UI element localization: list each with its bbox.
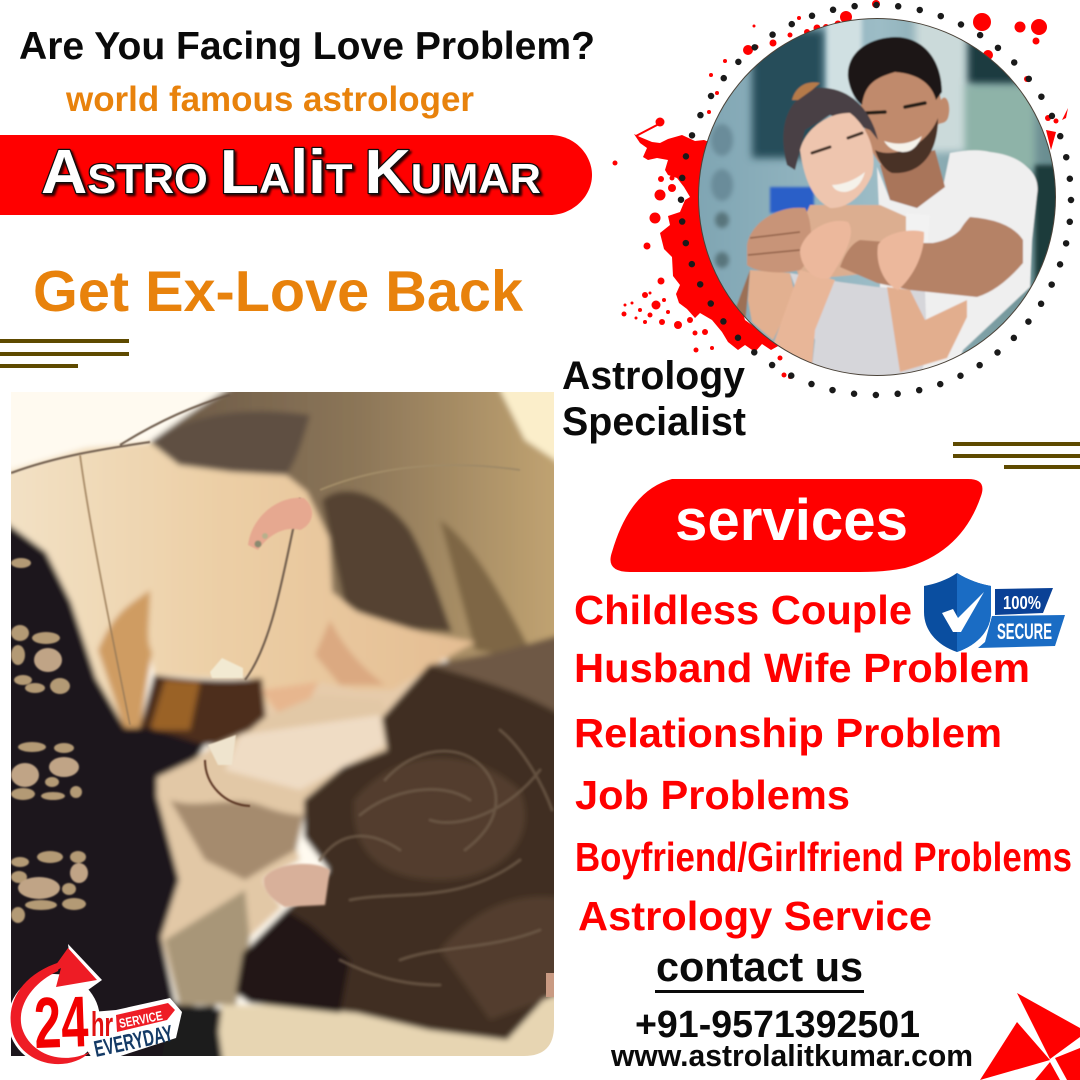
woman's hands [800,221,851,279]
text: astrology specialist: Astrology [562,354,745,398]
lace patches [11,558,88,923]
badge: 24hr service everyday: EVERYDAY [92,1020,175,1062]
necklace [80,455,130,725]
contact us: contact us [656,944,863,990]
service list [574,587,1072,939]
woman's tank top [790,273,927,385]
woman's shoulders and chest [790,205,907,280]
man's back behind arm [736,270,750,318]
text: astrology specialist: Specialist [562,400,746,444]
woman's mouth [210,658,243,678]
man's face and neck [151,700,362,991]
icon: red pinwheel [980,993,1080,1080]
services pill [610,479,982,572]
banner: astro lalit kumar: ASTRO LAliT KUMAR [41,138,541,207]
services pill: services [675,488,908,553]
hair curls [320,730,552,985]
woman's face and neck [0,442,475,730]
dotted ring [681,5,1071,395]
main blob [634,134,780,352]
photo: smiling couple in circle [698,18,1056,376]
service list: Childless Couple [574,587,912,633]
black sleeve [198,1000,226,1056]
man's arm [840,217,1023,297]
badge: 24hr service everyday [8,944,182,1066]
stray hair strands [11,395,520,680]
badge: 24hr service everyday: 24 [33,982,90,1064]
man's head [860,70,950,166]
woman's left arm [748,270,795,340]
ear with piercings [248,498,312,550]
hair under chin [135,675,268,745]
paint splatter [612,0,1068,379]
service list: Relationship Problem [574,710,1002,756]
heading: get ex-love back: Get Ex-Love Back [33,260,524,324]
man's neck [880,150,945,208]
icon: 100% secure badge: 100% [1003,593,1041,613]
photo: embracing couple [0,380,570,1080]
man's open mouth [208,735,236,765]
black lace top [0,518,228,1070]
title: are you facing love problem: Are You Facing Love Problem? [19,25,595,68]
decorative lines left [0,339,129,368]
tank strap [905,216,908,232]
decorative lines right [953,442,1080,469]
text: astrology specialist [562,354,746,444]
service list: Astrology Service [578,893,932,939]
woman's face [800,113,874,208]
woman's hair [155,392,554,666]
badge: 24hr service everyday: hr [91,1006,113,1044]
service list: Job Problems [575,772,850,818]
arm [212,994,554,1056]
icon: 100% secure badge [924,573,1065,652]
man's hair [284,662,554,1044]
subtitle: world famous astrologer: world famous astrologer [65,79,474,119]
woman's right arm [887,287,967,372]
man's hand [747,208,811,272]
man's ear [264,864,330,907]
skin at right edge [546,973,554,997]
website: www.astrolalitkumar.com [610,1038,973,1073]
badge: 24hr service everyday: SERVICE [118,1008,164,1031]
nose [264,683,316,712]
phone number: +91-9571392501 [635,1003,920,1045]
skin fill behind faces [260,672,426,720]
service list: Husband Wife Problem [574,645,1030,691]
man's t-shirt [877,150,1038,385]
woman's hair [783,88,878,170]
